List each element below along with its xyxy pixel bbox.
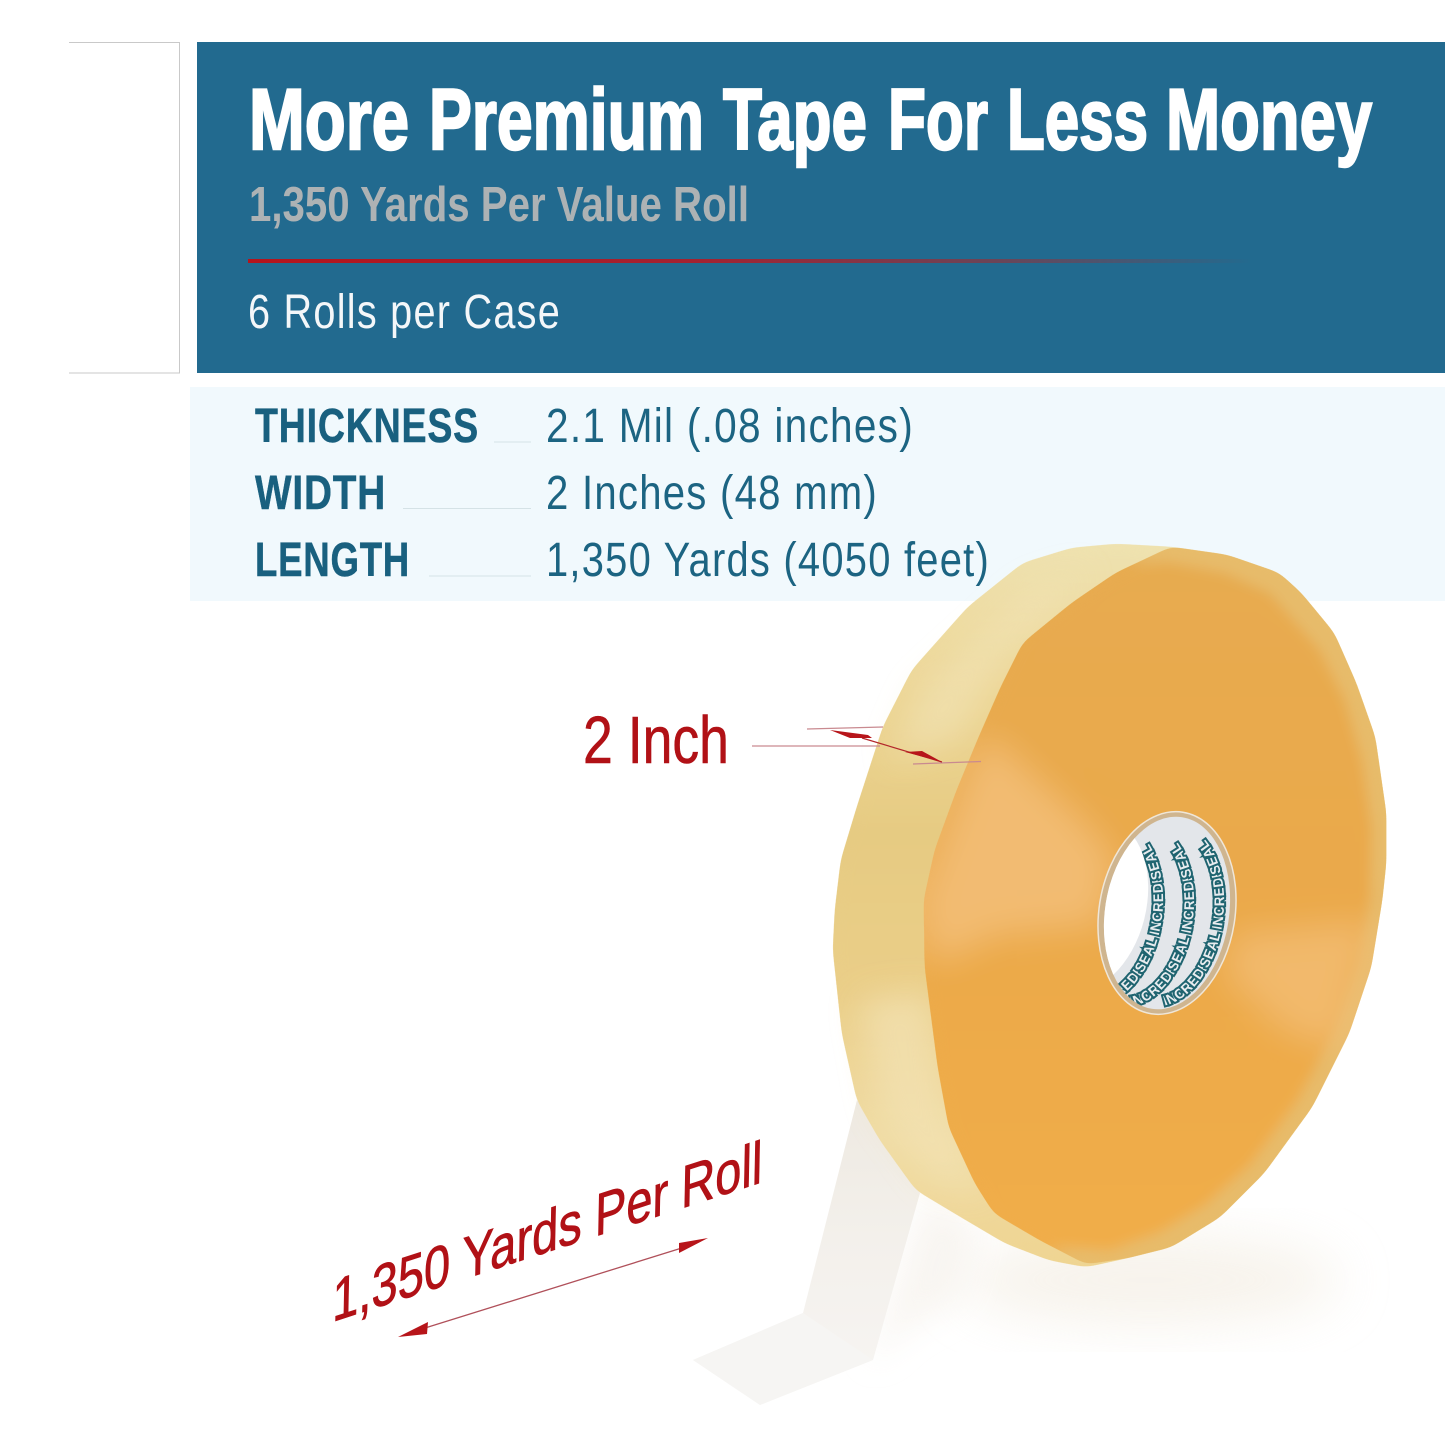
title: More (249, 72, 409, 168)
title: Premium (429, 72, 704, 168)
roll side (833, 544, 1386, 1267)
core branding (1118, 836, 1226, 1008)
red divider (248, 259, 1252, 263)
light streak lower right (1225, 920, 1375, 1050)
outlined empty box (69, 42, 180, 373)
roll front face (915, 547, 1386, 1264)
width label: 2 Inch (583, 703, 729, 778)
case count: 6 Rolls per Case (248, 286, 561, 339)
spec: width value: 2 Inches (48 mm) (546, 467, 878, 520)
spec: thickness label: THICKNESS (255, 400, 479, 453)
subtitle: 1,350 Yards Per Value Roll (249, 178, 749, 232)
spec: width label: WIDTH (255, 467, 386, 520)
length label: 1,350 Yards Per Roll (332, 1129, 763, 1336)
core branding: INCREDISEAL INCREDISEAL (1118, 841, 1166, 994)
floor shadow (960, 1235, 1340, 1325)
roll core (1097, 810, 1237, 1016)
title: Money (1166, 72, 1372, 168)
core branding: INCREDISEAL INCREDISEAL (1160, 836, 1226, 1008)
spec: thickness value: 2.1 Mil (.08 inches) (546, 400, 914, 453)
length arrow (398, 1238, 708, 1337)
title (249, 72, 1372, 168)
panel: header banner (197, 42, 1445, 373)
core branding: INCREDISEAL INCREDISEAL (1128, 840, 1196, 1006)
width arrow (752, 727, 981, 764)
tape strip (693, 1100, 980, 1405)
light streak upper left (915, 735, 1116, 965)
tape roll (832, 544, 1386, 1266)
title: For (888, 72, 988, 168)
spec: length label: LENGTH (255, 534, 410, 587)
panel: specifications (190, 387, 1445, 601)
core opening (1104, 838, 1148, 975)
title: Less (1007, 72, 1148, 168)
title: Tape (723, 72, 867, 168)
spec: length value: 1,350 Yards (4050 feet) (546, 534, 990, 587)
